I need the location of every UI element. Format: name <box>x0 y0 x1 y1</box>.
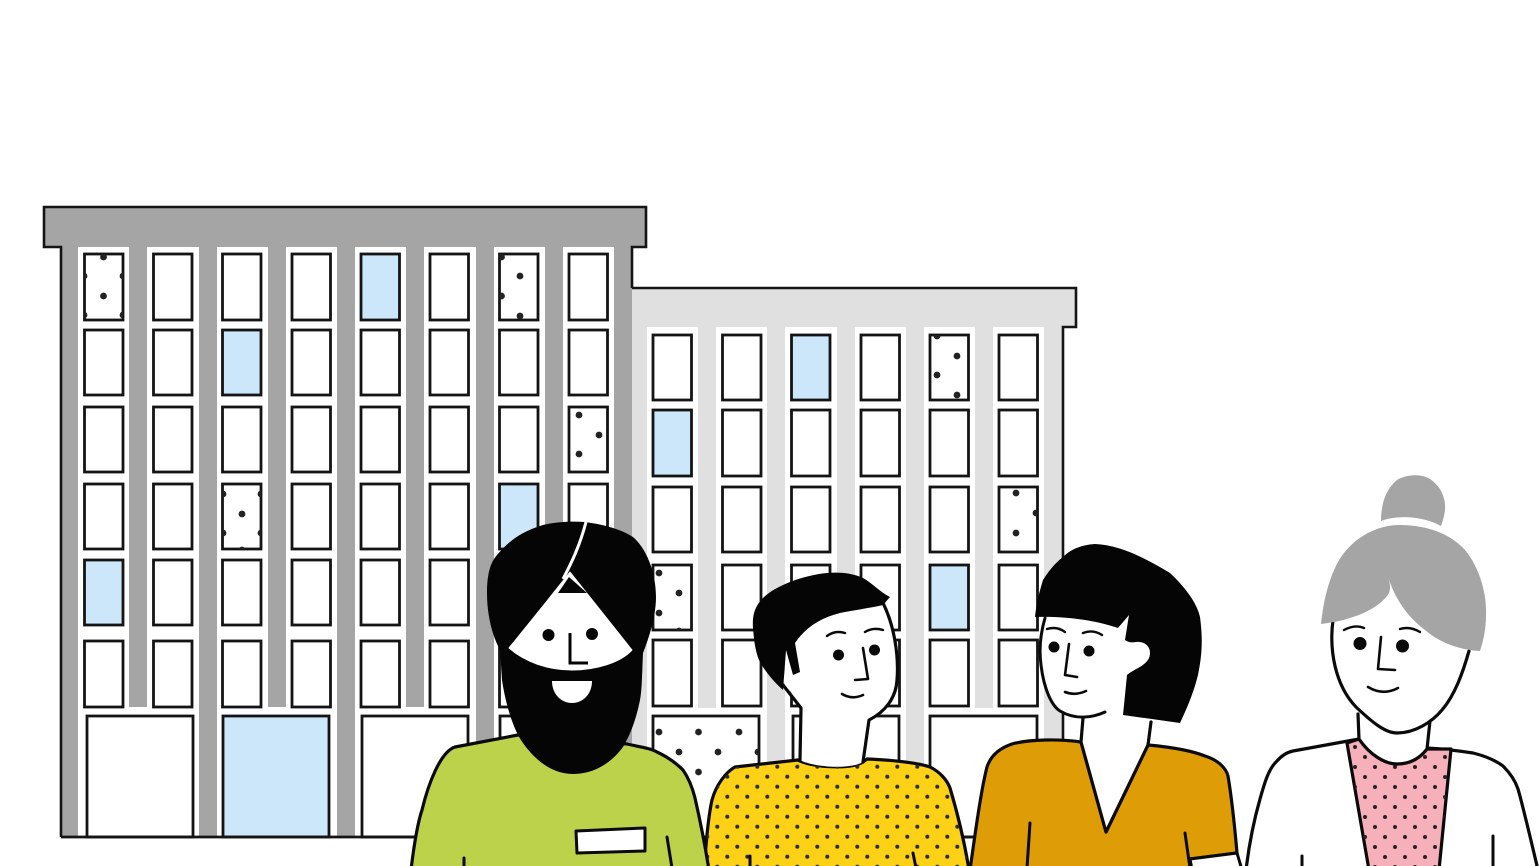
neck <box>1358 714 1430 764</box>
nose <box>1065 644 1077 677</box>
mouth <box>1065 691 1086 694</box>
eyes <box>1048 642 1094 656</box>
face outline <box>1040 618 1105 717</box>
eyebrows <box>1047 628 1102 635</box>
panel: lower light-grey building <box>632 288 1076 837</box>
dotted window patterns <box>81 254 602 553</box>
nose <box>1378 637 1395 670</box>
face opening <box>509 572 632 670</box>
ground floor doors <box>87 716 606 837</box>
neck and face outline <box>783 603 897 762</box>
eyebrows <box>1344 626 1420 632</box>
sleeve creases <box>1027 823 1190 866</box>
illustration: residents in front of apartment blocks <box>42 206 1539 866</box>
blouse dots <box>1347 739 1451 866</box>
building outline <box>44 207 646 837</box>
face fill <box>1332 570 1470 733</box>
sleeve creases <box>1302 836 1493 866</box>
pink blouse <box>1347 739 1451 866</box>
sleeve creases <box>750 853 916 866</box>
black hair <box>753 573 890 690</box>
nose <box>570 633 588 663</box>
neck and face fill <box>783 600 897 767</box>
mouth <box>842 694 863 697</box>
neck <box>1081 710 1152 832</box>
eyes <box>542 628 598 641</box>
neck lines and V neckline <box>1081 718 1151 832</box>
white window bays <box>78 247 614 837</box>
nose <box>855 648 868 680</box>
person: man in yellow dotted jumper <box>704 573 969 866</box>
mouth <box>1368 687 1398 692</box>
white window bays <box>647 327 1044 837</box>
person: woman with black bob and orange top <box>970 544 1242 866</box>
structural pillars <box>698 327 993 837</box>
ground floor doors <box>653 716 1037 837</box>
eyes <box>833 644 880 660</box>
windows, rows 1 to 6 <box>84 254 608 707</box>
smiling mouth <box>552 681 592 703</box>
turban fold <box>563 522 586 579</box>
black bob hair <box>1035 544 1202 723</box>
sleeve creases <box>464 837 672 866</box>
hair bun <box>1381 475 1445 526</box>
jumper dots <box>704 759 969 866</box>
person: man with turban and green shirt <box>411 522 709 866</box>
white jacket <box>1246 739 1538 866</box>
ground line <box>61 836 975 838</box>
turban peak <box>558 577 587 593</box>
turban and beard <box>487 522 656 774</box>
dotted window patterns <box>656 333 1039 775</box>
bare arm below sleeve <box>1190 853 1242 866</box>
face outline <box>1332 620 1469 733</box>
yellow jumper <box>704 759 969 866</box>
eyebrows <box>827 629 883 636</box>
building outline <box>632 288 1076 837</box>
eyes <box>1354 637 1409 652</box>
building body <box>44 207 646 837</box>
grey hair <box>1321 525 1486 651</box>
green shirt <box>411 735 709 866</box>
windows, rows 1 to 5 <box>653 335 1038 706</box>
panel: tall grey building <box>44 207 646 837</box>
person: older woman with grey bun and pink blouse <box>1246 475 1538 866</box>
face <box>1040 615 1135 717</box>
building body <box>632 288 1076 837</box>
structural pillars <box>129 247 563 837</box>
name badge <box>576 828 645 853</box>
orange top <box>970 740 1237 866</box>
